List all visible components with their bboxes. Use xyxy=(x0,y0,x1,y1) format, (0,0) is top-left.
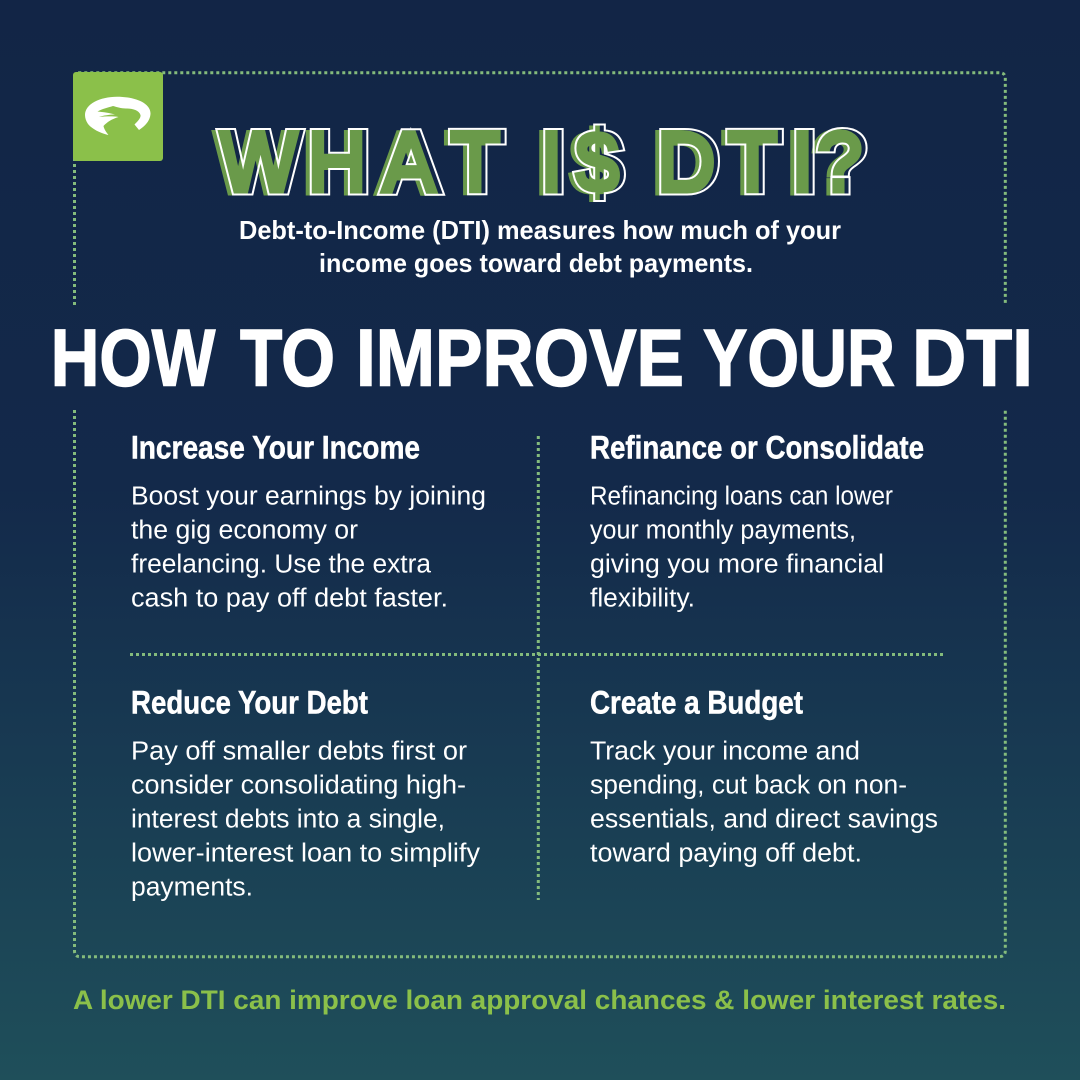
panel: reduce your debt: interest debts into a single, xyxy=(131,806,445,834)
icon: logo swoosh xyxy=(85,97,151,135)
grid dividers xyxy=(130,436,943,900)
panel: create a budget: Create a Budget xyxy=(590,684,803,720)
panel: refinance or consolidate: flexibility. xyxy=(590,584,695,612)
panel: increase your income: freelancing. Use the extra xyxy=(131,550,432,578)
panel: reduce your debt: Pay off smaller debts first or xyxy=(131,738,468,766)
panel: reduce your debt: lower-interest loan to simplify xyxy=(131,840,480,868)
panel: refinance or consolidate: giving you more financial xyxy=(590,550,884,578)
dotted frame panel xyxy=(74,73,1005,957)
panel: refinance or consolidate: Refinance or Consolidate xyxy=(590,430,924,466)
heading: how to improve your dti: YOUR xyxy=(703,314,895,404)
panel: reduce your debt: Reduce Your Debt xyxy=(131,684,368,720)
panel: create a budget: Track your income and xyxy=(590,738,860,766)
panel: refinance or consolidate: Refinancing loans can lower xyxy=(590,482,893,510)
subtitle: Debt-to-Income (DTI) measures how much of your xyxy=(239,215,841,245)
heading: how to improve your dti: DTI xyxy=(912,314,1033,404)
footer callout: A lower DTI can improve loan approval chances & lower interest rates. xyxy=(73,985,1006,1015)
panel: increase your income: the gig economy or xyxy=(131,516,359,544)
panel: refinance or consolidate: your monthly payments, xyxy=(590,516,856,544)
panel: increase your income xyxy=(131,430,486,612)
panel: increase your income: Increase Your Income xyxy=(131,430,420,466)
panel: create a budget: essentials, and direct savings xyxy=(590,806,938,834)
heading: how to improve your dti: HOW xyxy=(51,314,216,404)
heading: how to improve your dti xyxy=(51,314,1033,404)
panel: reduce your debt: consider consolidating high- xyxy=(131,772,466,800)
panel: increase your income: cash to pay off debt faster. xyxy=(131,584,448,612)
subtitle xyxy=(239,215,841,278)
panel: reduce your debt: payments. xyxy=(131,874,253,902)
heading: how to improve your dti: IMPROVE xyxy=(356,314,684,404)
subtitle: income goes toward debt payments. xyxy=(319,248,753,278)
title: what is dti: WHAT I$ DTI? xyxy=(0,116,864,212)
heading: how to improve your dti: TO xyxy=(240,314,335,404)
panel: create a budget: spending, cut back on non- xyxy=(590,772,907,800)
logo badge xyxy=(73,72,163,161)
panel: reduce your debt xyxy=(131,684,480,902)
panel: refinance or consolidate xyxy=(590,430,924,612)
title: what is dti xyxy=(211,124,868,202)
panel: create a budget xyxy=(590,684,938,868)
panel: increase your income: Boost your earnings by joining xyxy=(131,482,486,510)
panel: create a budget: toward paying off debt. xyxy=(590,840,862,868)
